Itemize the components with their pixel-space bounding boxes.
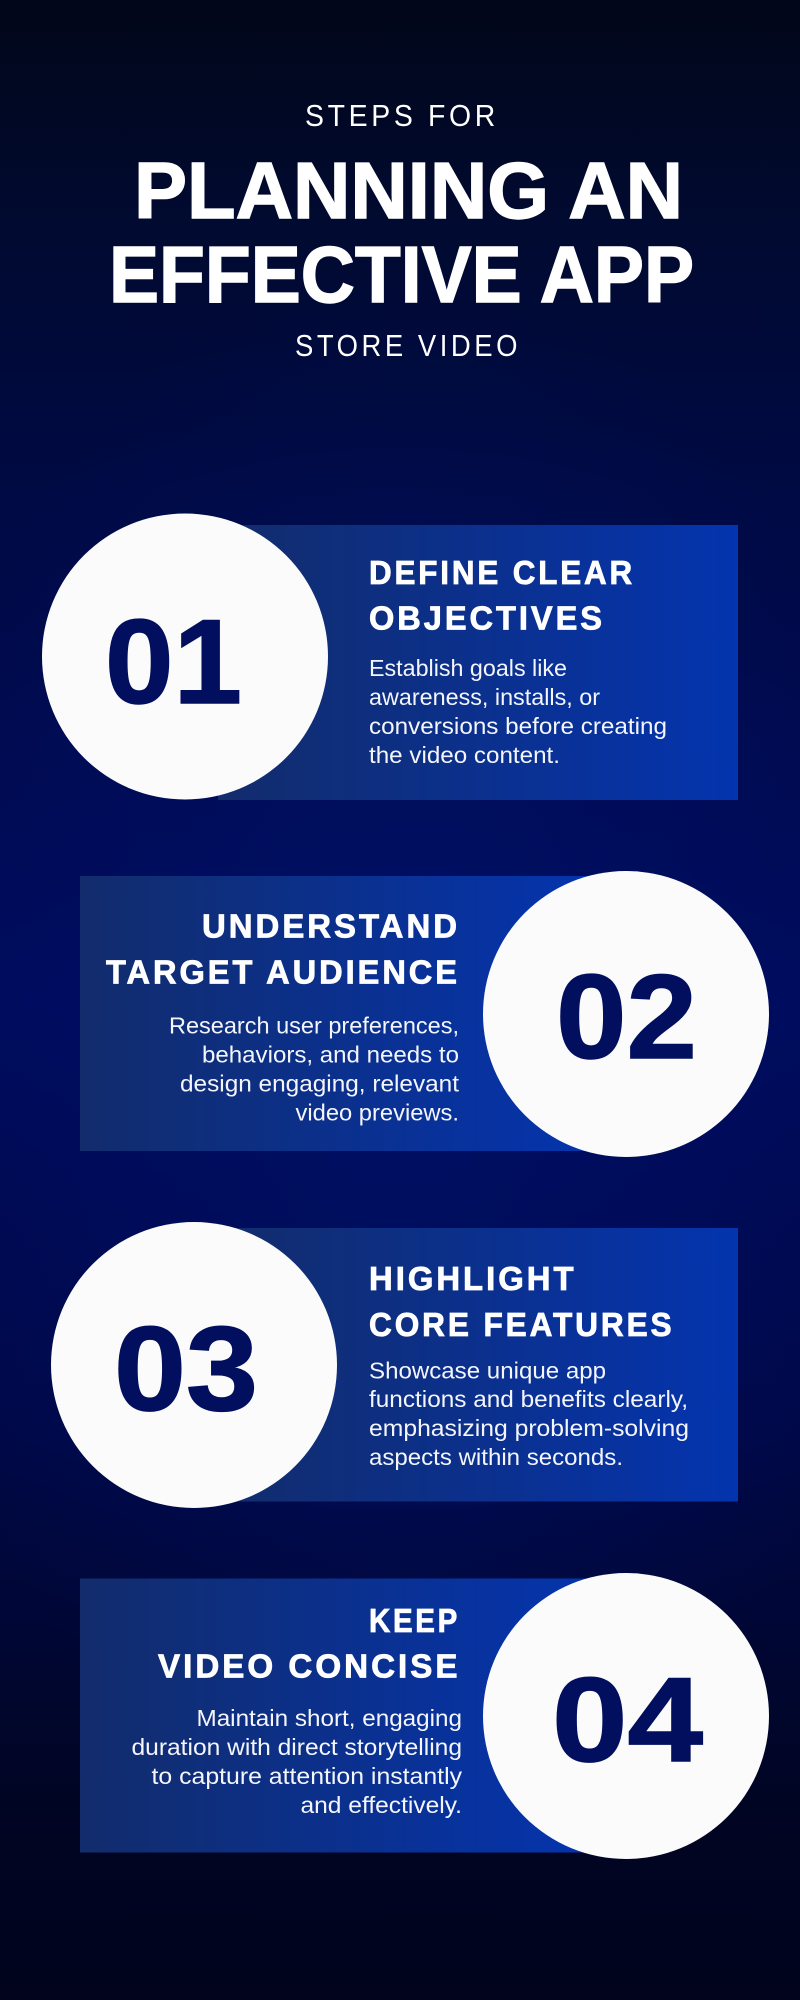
heading xyxy=(369,554,635,636)
heading: TARGET AUDIENCE xyxy=(106,954,460,990)
number circle xyxy=(51,1222,337,1508)
heading: KEEP xyxy=(369,1602,460,1639)
description: behaviors, and needs to xyxy=(202,1042,459,1068)
description: design engaging, relevant xyxy=(180,1070,460,1096)
description: and effectively. xyxy=(300,1792,462,1818)
description: functions and benefits clearly, xyxy=(369,1386,688,1412)
title line 2: EFFECTIVE APP xyxy=(109,230,694,319)
description: Research user preferences, xyxy=(169,1012,459,1038)
heading xyxy=(106,908,460,990)
description: Establish goals like xyxy=(369,655,567,681)
number circle xyxy=(42,514,328,800)
heading: DEFINE CLEAR xyxy=(369,554,635,591)
panel: step 3 highlight core features xyxy=(51,1222,738,1508)
description: video previews. xyxy=(296,1100,459,1126)
panel: step 1 define clear objectives xyxy=(42,514,738,800)
heading: UNDERSTAND xyxy=(202,908,460,944)
heading xyxy=(158,1602,460,1684)
number circle xyxy=(483,1573,769,1859)
number 02: 02 xyxy=(556,950,697,1084)
number 04: 04 xyxy=(552,1653,703,1787)
panel: step 4 keep video concise xyxy=(80,1573,769,1859)
description: Maintain short, engaging xyxy=(196,1705,462,1731)
heading: OBJECTIVES xyxy=(369,600,605,636)
title line 1: PLANNING AN xyxy=(134,146,683,235)
description xyxy=(369,655,667,768)
panel background xyxy=(218,1228,738,1502)
description xyxy=(369,1358,689,1470)
description: aspects within seconds. xyxy=(369,1444,623,1470)
description xyxy=(169,1012,460,1126)
heading: HIGHLIGHT xyxy=(369,1260,576,1297)
subtitle: store video: STORE VIDEO xyxy=(295,328,521,363)
panel background xyxy=(218,525,738,800)
description: emphasizing problem-solving xyxy=(369,1415,689,1441)
heading: CORE FEATURES xyxy=(369,1306,674,1343)
description xyxy=(132,1705,463,1818)
description: awareness, installs, or xyxy=(369,684,600,710)
panel: step 2 understand target audience xyxy=(80,871,769,1157)
description: conversions before creating xyxy=(369,713,667,739)
heading xyxy=(369,1260,674,1343)
description: duration with direct storytelling xyxy=(132,1734,462,1760)
description: Showcase unique app xyxy=(369,1358,606,1384)
number 01: 01 xyxy=(105,595,242,729)
panel background xyxy=(80,876,600,1151)
heading: VIDEO CONCISE xyxy=(158,1648,460,1684)
number circle xyxy=(483,871,769,1157)
header xyxy=(109,98,694,363)
description: to capture attention instantly xyxy=(152,1763,463,1789)
eyebrow: steps for: STEPS FOR xyxy=(305,98,499,133)
panel background xyxy=(80,1578,600,1852)
description: the video content. xyxy=(369,742,560,768)
number 03: 03 xyxy=(114,1302,258,1436)
